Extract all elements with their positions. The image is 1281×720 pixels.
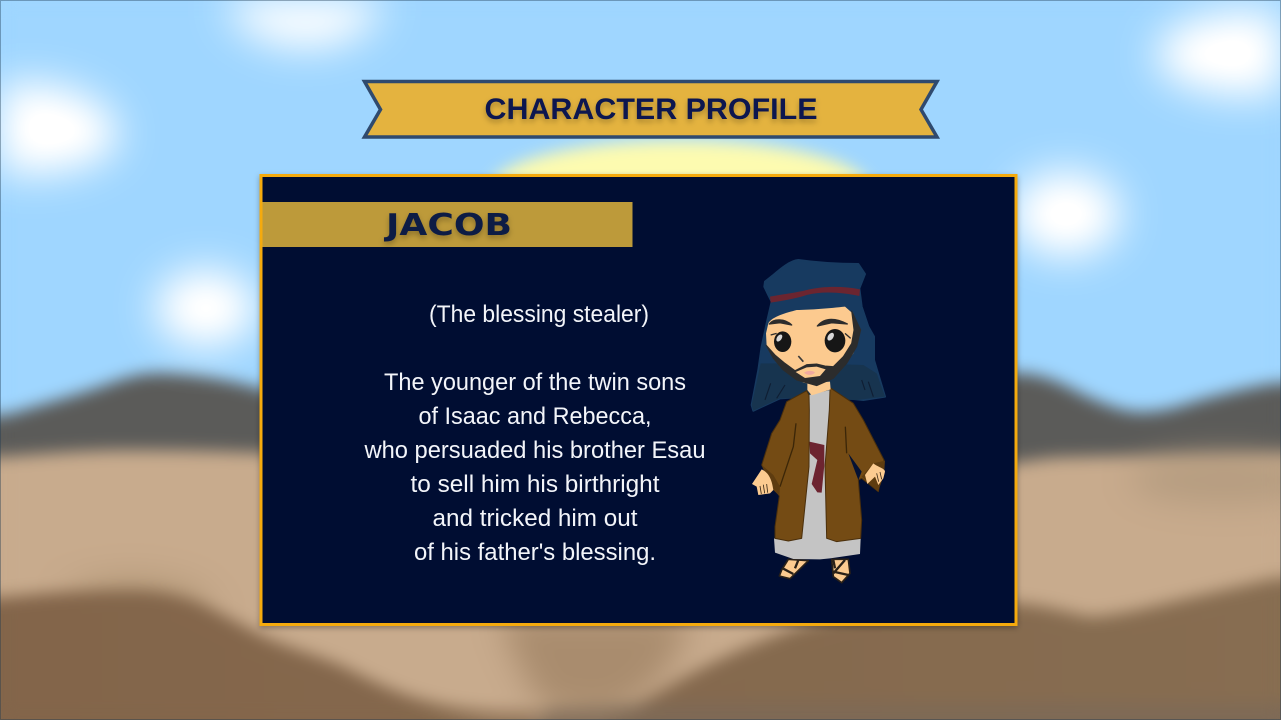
card background (261, 176, 1016, 624)
description text: who persuaded his brother Esau (364, 437, 706, 464)
banner: character profile (364, 82, 937, 137)
name: Jacob: JACOB (384, 208, 512, 243)
name bar (262, 202, 632, 247)
description text: The younger of the twin sons (384, 369, 686, 396)
banner title: CHARACTER PROFILE (484, 93, 818, 126)
description text (364, 301, 706, 566)
panel: profile card (261, 176, 1016, 624)
character body (752, 388, 885, 583)
description text: to sell him his birthright (410, 471, 660, 498)
character face (766, 307, 861, 395)
icon: Jacob character illustration (752, 260, 885, 583)
description text: and tricked him out (432, 505, 638, 532)
description text: (The blessing stealer) (429, 301, 649, 328)
character headscarf (752, 260, 885, 411)
description text: of Isaac and Rebecca, (418, 403, 652, 430)
banner ribbon shape (364, 82, 937, 137)
description text: of his father's blessing. (414, 539, 656, 566)
